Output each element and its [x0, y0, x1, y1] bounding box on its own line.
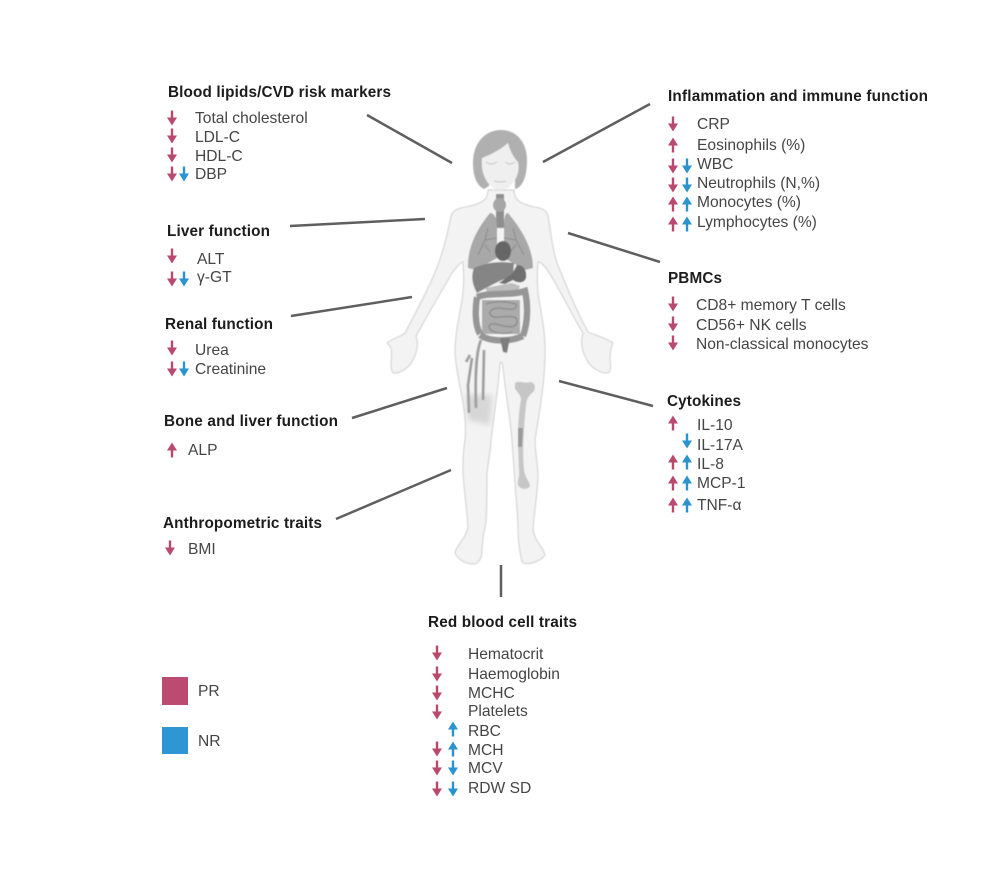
legend: PR [198, 683, 220, 700]
small intestine folds [486, 302, 517, 333]
human body illustration [387, 130, 613, 564]
panel: liver function: ALT [197, 251, 225, 268]
panel: PBMCs: Non-classical monocytes [696, 336, 869, 353]
panel: red blood cell traits: Platelets [468, 703, 528, 720]
panel: cytokines: IL-8 [697, 456, 724, 473]
trachea and thyroid [496, 194, 504, 228]
large intestine [476, 291, 527, 340]
panel: red blood cell traits: RBC [468, 723, 501, 740]
panel: renal function: Creatinine [195, 361, 266, 378]
panel: renal function: Urea [195, 342, 229, 359]
rectum [500, 338, 510, 353]
panel: inflammation and immune function: CRP [697, 116, 730, 133]
panel: inflammation and immune function: Lymphocytes (%) [697, 214, 817, 231]
bronchi [478, 228, 524, 255]
panel: red blood cell traits: Haemoglobin [468, 666, 560, 683]
panel: inflammation and immune function [668, 88, 928, 232]
thigh shadow [466, 395, 492, 425]
panel: red blood cell traits: MCV [468, 760, 503, 777]
panel: cytokines: IL-10 [697, 417, 733, 434]
bone fracture shade [518, 428, 523, 447]
panel: bone and liver function: Bone and liver function [164, 413, 338, 430]
panel: anthropometric traits: Anthropometric traits [163, 515, 322, 532]
legend: NR [198, 733, 221, 750]
panel: inflammation and immune function: Monocytes (%) [697, 194, 801, 211]
body silhouette [387, 190, 613, 564]
vessels and muscles in thigh [466, 340, 484, 413]
heart [495, 241, 511, 261]
panel: cytokines: MCP-1 [697, 475, 746, 492]
panel: anthropometric traits [163, 515, 322, 558]
panel: PBMCs: CD56+ NK cells [696, 317, 807, 334]
panel: cytokines [667, 393, 746, 514]
panel: inflammation and immune function: Neutrophils (N,%) [697, 175, 820, 192]
eyes and mouth [486, 162, 515, 182]
panel: liver function [167, 223, 270, 286]
panel: cytokines: Cytokines [667, 393, 741, 410]
panel: red blood cell traits: MCH [468, 742, 504, 759]
face [482, 143, 519, 190]
panel: blood lipids: DBP [195, 166, 227, 183]
panel: blood lipids: Total cholesterol [195, 110, 308, 127]
lungs [468, 213, 533, 270]
panel: bone and liver function: ALP [188, 442, 217, 459]
panel: red blood cell traits [428, 614, 577, 797]
connector lines [290, 104, 660, 597]
panel: red blood cell traits: Red blood cell traits [428, 614, 577, 631]
femur bone [515, 382, 535, 489]
panel: anthropometric traits: BMI [188, 541, 216, 558]
panel: inflammation and immune function: Eosinophils (%) [697, 137, 805, 154]
panel: bone and liver function [164, 413, 338, 459]
panel: cytokines: IL-17A [697, 437, 744, 454]
panel: PBMCs: PBMCs [668, 270, 722, 287]
hair [473, 130, 527, 189]
panel: red blood cell traits: RDW SD [468, 780, 531, 797]
pancreas [485, 283, 520, 297]
panel: blood lipids: HDL-C [195, 148, 243, 165]
small intestine region [482, 300, 520, 334]
panel: blood lipids: Blood lipids/CVD risk markers [168, 84, 391, 101]
panel: blood lipids: LDL-C [195, 129, 240, 146]
legend [162, 677, 221, 754]
panel: cytokines: TNF-α [697, 497, 742, 514]
panel: liver function: Liver function [167, 223, 270, 240]
panel: red blood cell traits: MCHC [468, 685, 515, 702]
panel: liver function: γ-GT [197, 269, 232, 286]
panel: PBMCs: CD8+ memory T cells [696, 297, 846, 314]
panel: blood lipids [167, 84, 391, 183]
liver [472, 262, 514, 293]
panel: renal function: Renal function [165, 316, 273, 333]
stomach [499, 265, 526, 284]
panel: renal function [165, 316, 273, 378]
panel: PBMCs [668, 270, 869, 353]
panel: red blood cell traits: Hematocrit [468, 646, 544, 663]
panel: inflammation and immune function: WBC [697, 156, 733, 173]
panel: inflammation and immune function: Inflammation and immune function [668, 88, 928, 105]
